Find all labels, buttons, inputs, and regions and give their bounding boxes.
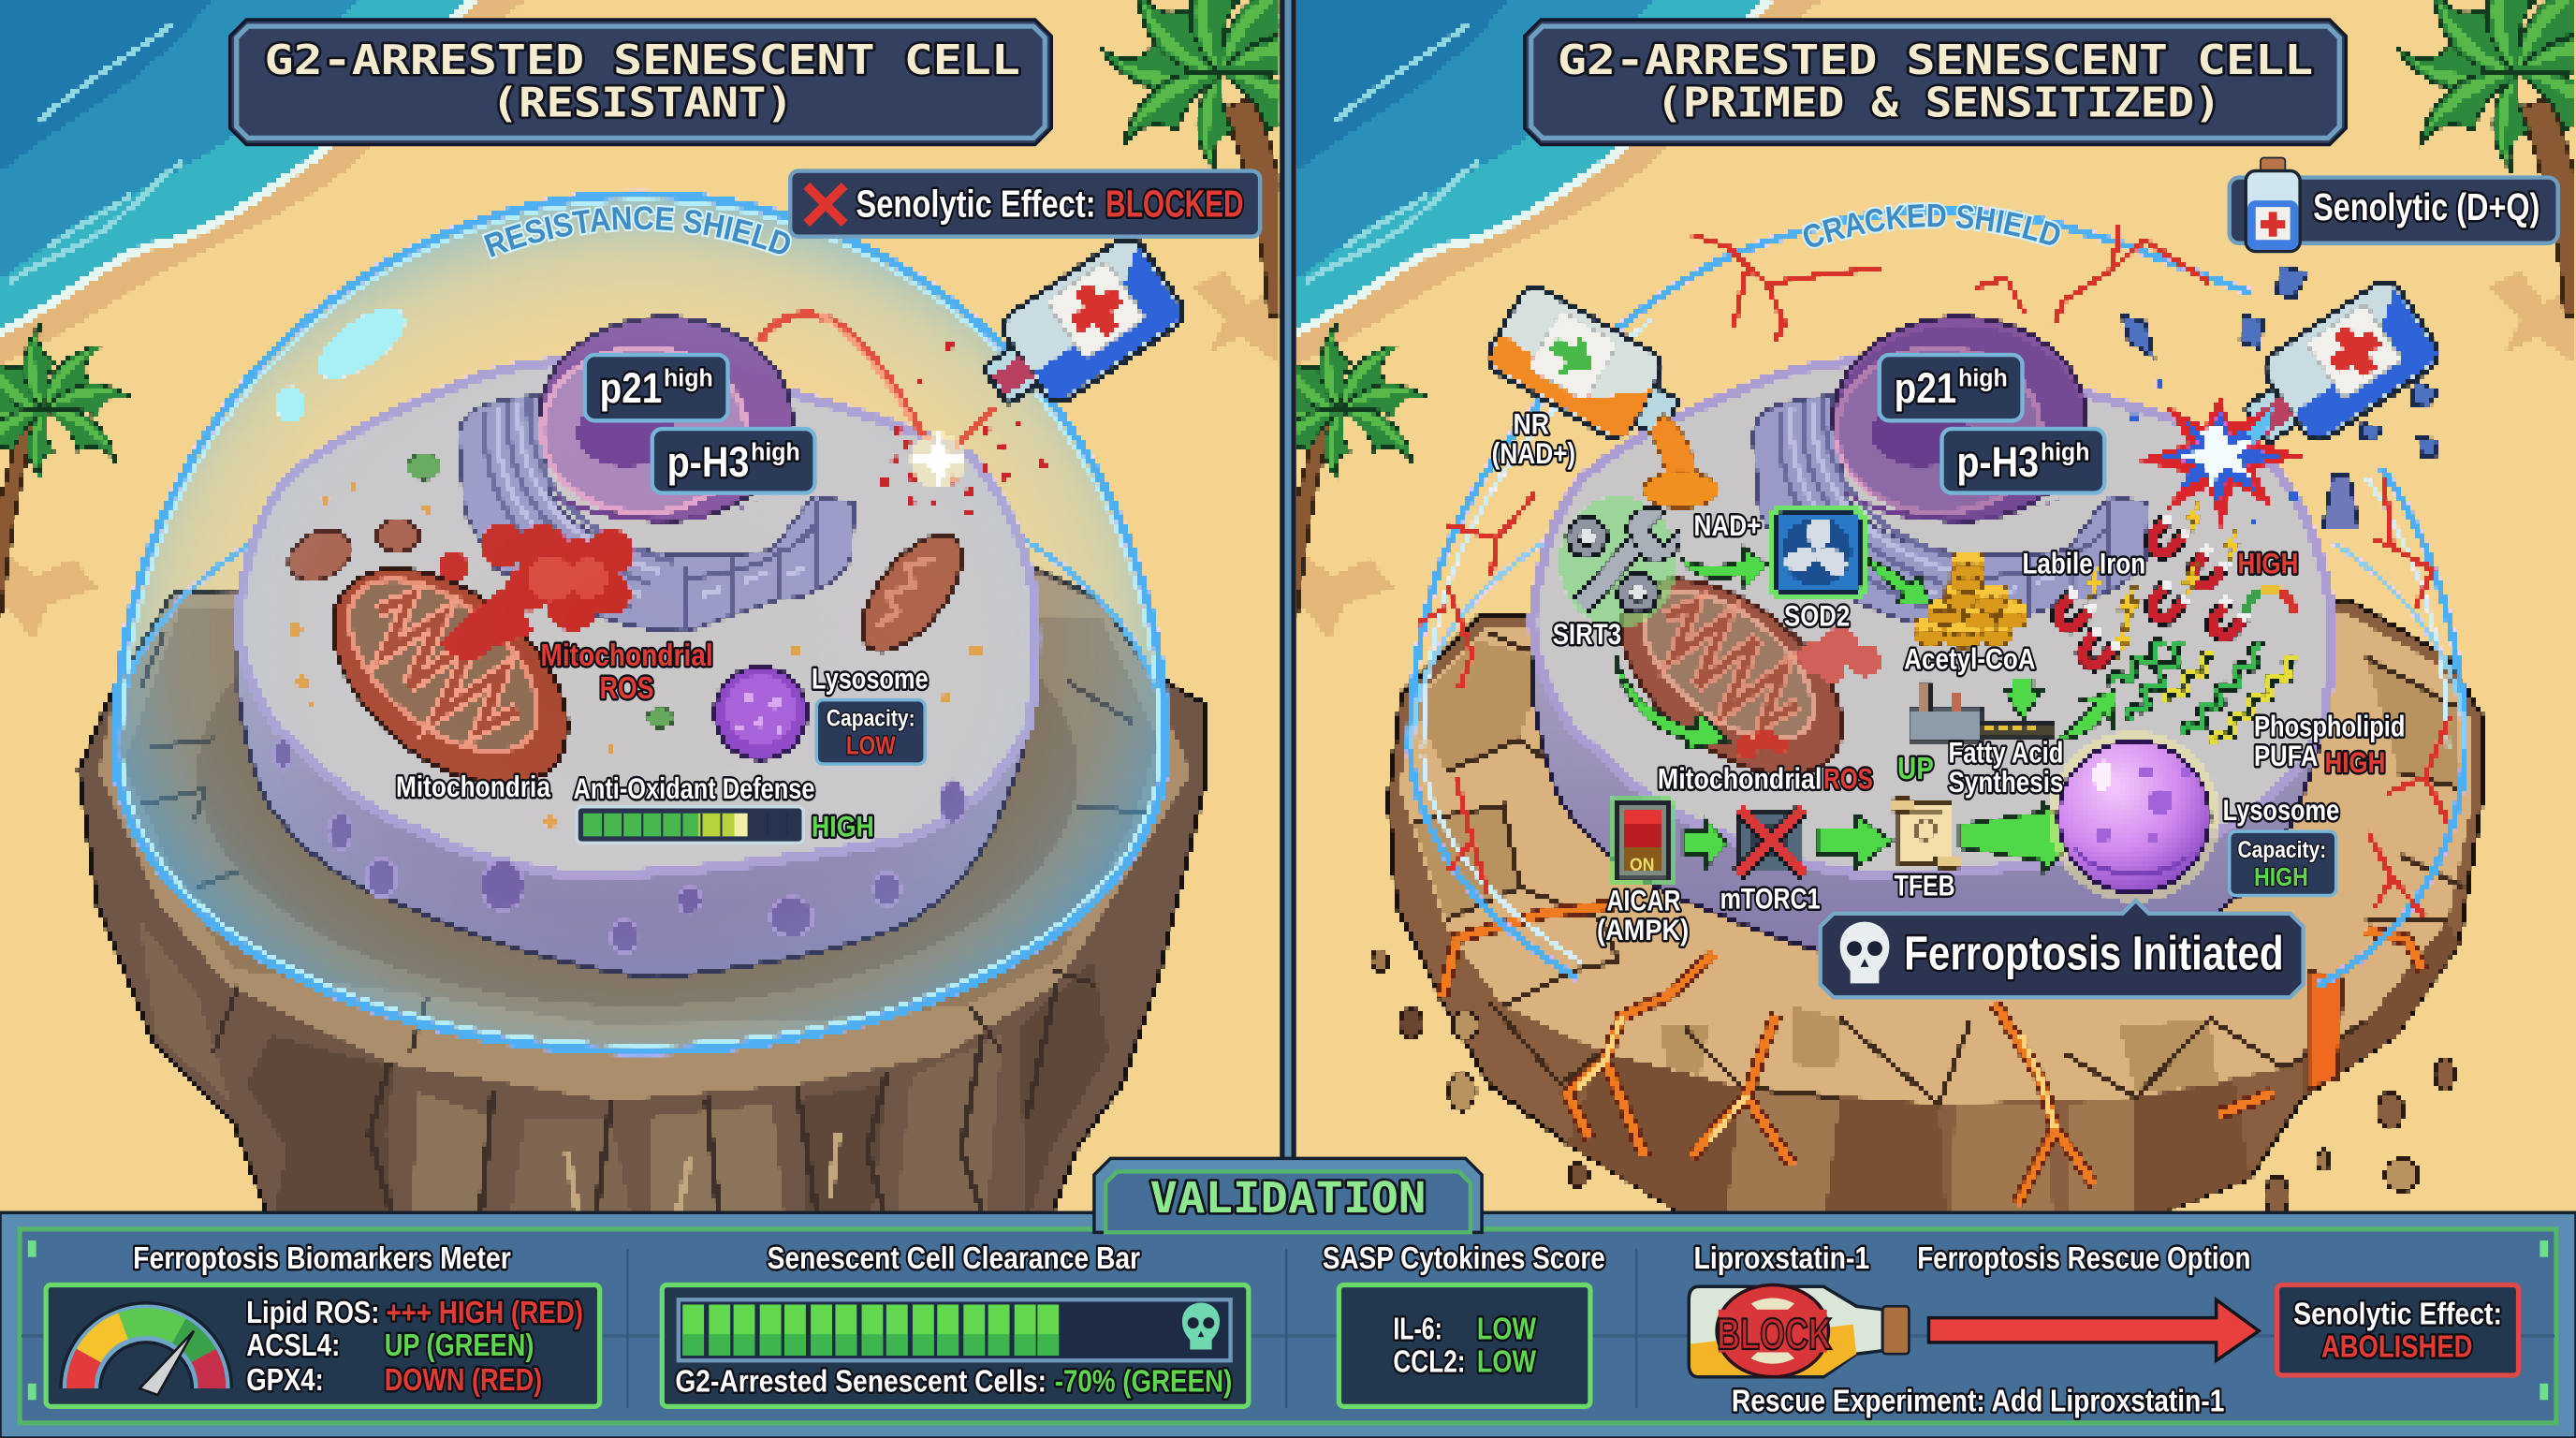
label: phospholipid PUFA high [2254, 709, 2405, 779]
icon: TFEB scroll [1891, 799, 1962, 868]
icon: SIRT3 wrench and gears [1559, 496, 1680, 627]
capacity high box: Capacity: [2237, 838, 2326, 863]
tab: validation: VALIDATION [1150, 1173, 1426, 1223]
section: ferroptosis biomarkers meter: Lipid ROS: [246, 1296, 379, 1330]
callout: senolytic effect blocked: BLOCKED [1105, 183, 1244, 226]
title: resistant [230, 20, 1051, 144]
scene art: beach, island, cell, shield [0, 0, 1348, 1225]
cell body [238, 361, 1036, 977]
debris stones [1372, 949, 2454, 1216]
section: senescent cell clearance bar: Senescent Cell Clearance Bar [768, 1241, 1140, 1276]
label: cracked shield: CRACKED SHIELD [1802, 202, 2061, 249]
section: ferroptosis biomarkers meter: ACSL4: [246, 1328, 340, 1363]
label: phospholipid PUFA high: Phospholipid [2254, 709, 2405, 742]
small organelles [281, 453, 983, 829]
label: fatty acid synthesis up: UP [1897, 752, 1934, 786]
label: AICAR AMPK [1597, 856, 1689, 946]
icon: AICAR switch [1610, 797, 1674, 886]
arrows: green pathway [1615, 546, 2116, 871]
icon: small iron gauge [2247, 589, 2293, 614]
lower rock side [1567, 920, 2459, 1225]
section: SASP cytokines score: SASP Cytokines Score [1323, 1241, 1605, 1276]
impact spark [879, 340, 1048, 517]
label: phospholipid PUFA high: HIGH [2324, 745, 2385, 779]
section: ferroptosis biomarkers meter: DOWN (RED) [385, 1363, 542, 1398]
label: lysosome: Lysosome [812, 661, 929, 695]
section: ferroptosis biomarkers meter: UP (GREEN) [385, 1328, 534, 1363]
icon: red x [807, 185, 844, 224]
callout: senolytic effect blocked: Senolytic Effect: [856, 183, 1096, 226]
icon: labile iron magnets [2050, 501, 2251, 672]
label: labile iron high: HIGH [2237, 547, 2298, 580]
arrow: rescue result [1928, 1299, 2259, 1360]
NR bottle pouring [1482, 281, 1719, 507]
tab: validation [1094, 1158, 1482, 1232]
label: mitochondrial ROS [540, 638, 713, 706]
label: mitochondrial ROS: Mitochondrial [1658, 761, 1822, 795]
label: Acetyl-CoA: Acetyl-CoA [1904, 641, 2036, 675]
label: fatty acid synthesis up: Synthesis [1949, 765, 2063, 799]
progress segments [694, 1305, 1048, 1356]
damaged mitochondrion [1586, 541, 1881, 813]
section: ferroptosis biomarkers meter: +++ HIGH (RED) [386, 1296, 583, 1330]
label: NR NAD+ [1492, 406, 1575, 470]
section: ferroptosis biomarkers meter: GPX4: [246, 1363, 324, 1398]
shaded stones [1412, 640, 2461, 1093]
large lysosome [2049, 731, 2219, 902]
section: SASP cytokines score [1323, 1241, 1605, 1406]
anti-oxidant defense meter: Anti-Oxidant Defense [574, 771, 815, 805]
icon: mTORC1 blocked [1738, 809, 1804, 874]
callout: senolytic effect blocked [790, 171, 1260, 237]
section: ferroptosis biomarkers meter [46, 1241, 600, 1406]
marker: p21 high: p21 [600, 364, 662, 412]
title: primed and sensitized [1525, 20, 2346, 144]
label: NAD+: NAD+ [1694, 508, 1761, 542]
label: phospholipid PUFA high: PUFA [2254, 739, 2318, 772]
scene labels and boxes [1490, 18, 2560, 1000]
label: labile iron high: Labile Iron [2023, 547, 2145, 580]
capacity low box: LOW [846, 731, 896, 760]
icon: blocked liproxstatin bottle [1689, 1284, 1909, 1377]
section: liproxstatin rescue: Ferroptosis Rescue Option [1917, 1241, 2250, 1276]
section: senescent cell clearance bar: G2-Arrested Senescent Cells: [675, 1365, 1046, 1400]
callout: senolytic effect abolished [2277, 1284, 2519, 1375]
capacity low box [816, 700, 925, 764]
lava cracks [1442, 905, 2423, 1204]
cell body [1532, 317, 2331, 977]
label: fatty acid synthesis up: Fatty Acid [1949, 735, 2063, 769]
label: AICAR AMPK: AICAR [1606, 883, 1681, 917]
section: SASP cytokines score: IL-6: [1393, 1312, 1442, 1346]
capacity low box: Capacity: [827, 707, 915, 732]
anti-oxidant defense meter [574, 771, 874, 843]
label: NR NAD+: (NAD+) [1492, 436, 1575, 470]
icon: blocked liproxstatin bottle: BLOCK [1717, 1310, 1832, 1359]
label: labile iron high [2023, 547, 2298, 580]
section: SASP cytokines score: CCL2: [1393, 1345, 1466, 1380]
label: lysosome: Lysosome [2223, 793, 2339, 827]
panel: resistant cell scene [0, 0, 1281, 1211]
panel: primed and sensitized cell scene [1296, 0, 2574, 1211]
section: senescent cell clearance bar: -70% (GREEN) [1055, 1365, 1232, 1400]
marker: p21 high: p21 [1895, 364, 1956, 412]
callout: senolytic effect abolished: Senolytic Effect: [2293, 1298, 2502, 1332]
title: resistant: (RESISTANT) [491, 80, 794, 127]
title: primed and sensitized: (PRIMED & SENSITIZED) [1656, 80, 2221, 127]
label: SOD2: SOD2 [1784, 599, 1850, 633]
rock island [79, 539, 1204, 1225]
section: liproxstatin rescue [1689, 1241, 2519, 1419]
label: resistance shield: RESISTANCE SHIELD [481, 204, 792, 260]
anti-oxidant defense meter: HIGH [812, 809, 874, 843]
section: senescent cell clearance bar [662, 1241, 1249, 1406]
cracked rock island [1372, 600, 2482, 1225]
icon: fatty acid factory [1910, 682, 2056, 741]
label: AICAR AMPK: (AMPK) [1597, 913, 1689, 946]
section: SASP cytokines score: LOW [1477, 1312, 1536, 1346]
lysosome small [714, 668, 807, 759]
scene art: beach, cracked island, cell, broken shield [1254, 0, 2576, 1225]
panel: validation dashboard [0, 1158, 2576, 1438]
shield shards [2123, 266, 2438, 529]
marker: p21 high: high [1958, 363, 2008, 391]
label: mitochondrial ROS: ROS [1823, 761, 1873, 795]
icon: skull [1840, 922, 1889, 983]
scene labels and boxes [228, 18, 1262, 844]
capacity high box [2230, 831, 2336, 896]
broken shield [1410, 210, 2465, 986]
icon: SOD2 fan [1769, 506, 1866, 600]
label: NR NAD+: NR [1513, 406, 1549, 440]
mitochondrion [332, 566, 571, 786]
section: liproxstatin rescue: Rescue Experiment: Add Liproxstatin-1 [1732, 1385, 2224, 1419]
label: mitochondrial ROS: Mitochondrial [540, 638, 713, 673]
title: resistant: G2-ARRESTED SENESCENT CELL [265, 37, 1020, 84]
senolytic bottle blocked [759, 231, 1190, 517]
marker: p-H3 high: p-H3 [1956, 438, 2039, 486]
icon: PUFA chains [2109, 639, 2302, 749]
title: primed and sensitized: G2-ARRESTED SENESCENT CELL [1558, 37, 2313, 84]
marker: p21 high [585, 355, 728, 420]
mitochondrial ROS cloud [439, 522, 634, 661]
marker: p-H3 high: high [751, 437, 800, 465]
callout: senolytic D+Q [2230, 157, 2558, 252]
section: SASP cytokines score: LOW [1477, 1345, 1536, 1380]
marker: p-H3 high [652, 429, 815, 493]
label: fatty acid synthesis up [1897, 735, 2063, 799]
marker: p-H3 high: high [2041, 437, 2089, 465]
divider between panels [1280, 0, 1296, 1216]
label: TFEB: TFEB [1895, 869, 1955, 902]
shield dome [115, 194, 1166, 1051]
label: mTORC1: mTORC1 [1720, 882, 1821, 916]
capacity high box: HIGH [2254, 862, 2308, 891]
label: mitochondria: Mitochondria [396, 770, 550, 803]
callout: ferroptosis initiated [1821, 901, 2304, 997]
label: mitochondrial ROS: ROS [600, 671, 654, 706]
icon: clearance skull [1182, 1302, 1220, 1349]
impact bottle and burst [2130, 275, 2446, 529]
callout: ferroptosis initiated: Ferroptosis Initiated [1904, 927, 2284, 980]
callout: senolytic effect abolished: ABOLISHED [2321, 1330, 2472, 1365]
gauge [80, 1322, 212, 1395]
icon: acetyl-CoA coins [1914, 551, 2027, 648]
marker: p-H3 high [1942, 429, 2104, 493]
icon: drug vial [2246, 157, 2300, 252]
crack lines [1412, 633, 2465, 1104]
label: AICAR AMPK: ON [1630, 856, 1654, 875]
section: liproxstatin rescue: Liproxstatin-1 [1694, 1241, 1869, 1276]
marker: p21 high [1880, 355, 2023, 420]
label: SIRT3: SIRT3 [1553, 617, 1621, 651]
marker: p-H3 high: p-H3 [667, 438, 749, 486]
marker: p21 high: high [664, 363, 713, 391]
nucleus and ER stacks [459, 317, 855, 631]
section: ferroptosis biomarkers meter: Ferroptosis Biomarkers Meter [133, 1241, 511, 1276]
